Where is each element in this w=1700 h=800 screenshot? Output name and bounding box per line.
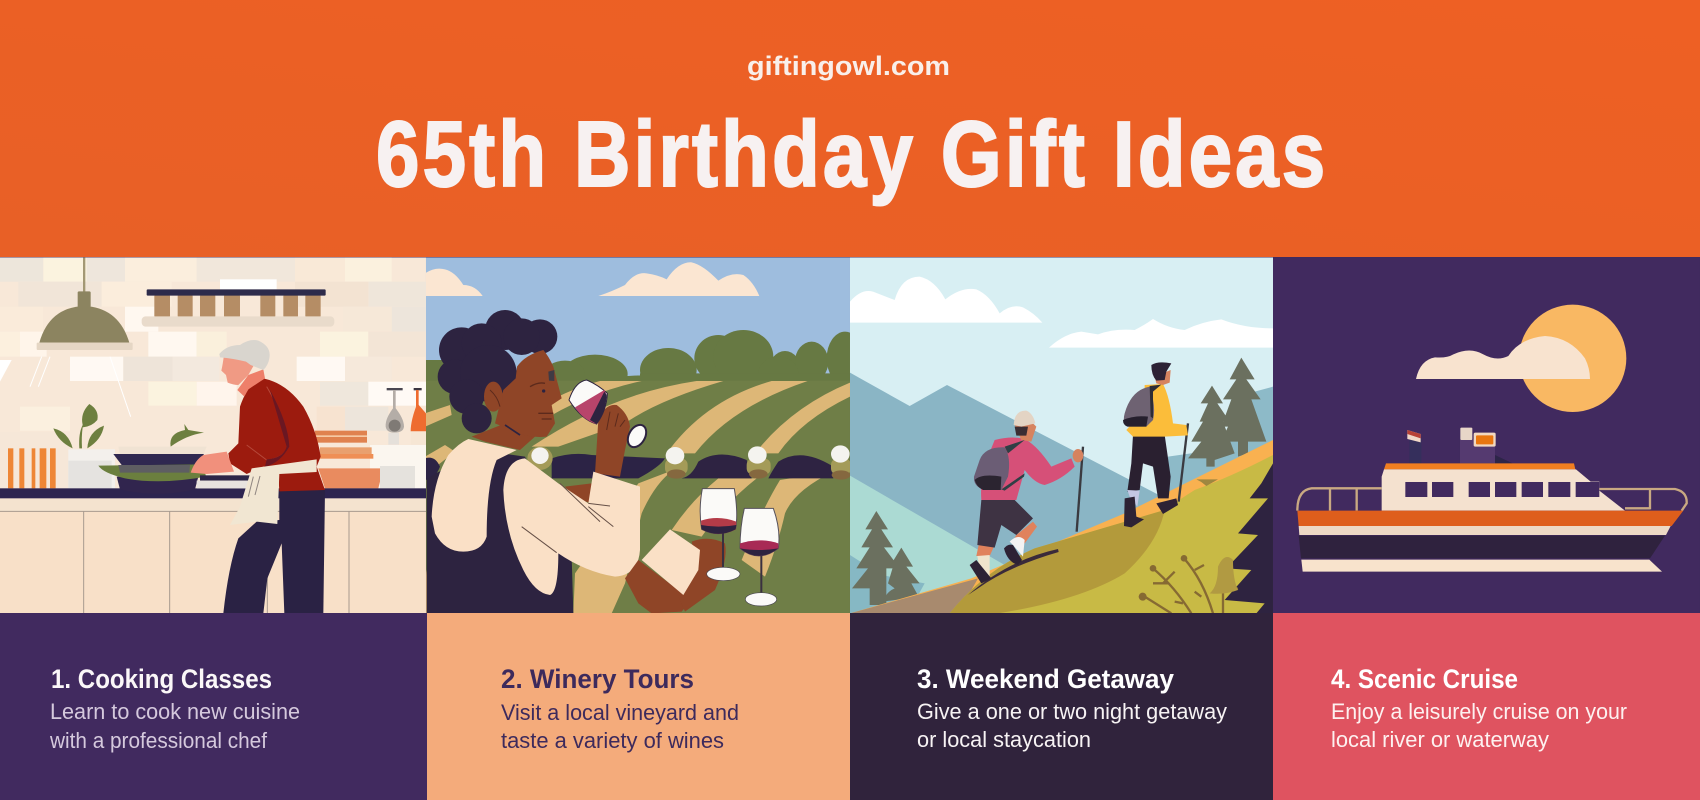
hair xyxy=(438,310,557,433)
hand xyxy=(1073,449,1083,462)
icon: cooking pans xyxy=(98,454,250,488)
clouds xyxy=(850,277,1273,348)
face xyxy=(495,350,562,437)
vineyard field xyxy=(425,381,855,621)
card: scenic cruise xyxy=(1273,613,1700,800)
yellow jacket xyxy=(1126,384,1188,437)
head xyxy=(1155,370,1171,385)
icon: hanging wine glasses xyxy=(386,388,426,445)
hill trail xyxy=(850,440,1273,613)
card heading: 2. Winery Tours xyxy=(501,664,694,694)
deck roof xyxy=(1384,463,1575,469)
hull stripes xyxy=(1297,511,1683,526)
card: winery tours xyxy=(427,613,850,800)
panel: hiking illustration xyxy=(848,257,1278,617)
dark fir right xyxy=(1225,463,1273,613)
cuff xyxy=(642,529,700,595)
card description xyxy=(917,699,1227,752)
panel: cooking illustration xyxy=(0,257,427,614)
hands xyxy=(191,452,234,474)
card description: taste a variety of wines xyxy=(501,728,724,753)
card description: Give a one or two night getaway xyxy=(917,699,1227,724)
clouds xyxy=(425,262,759,296)
face xyxy=(221,355,254,385)
card description: local river or waterway xyxy=(1331,727,1549,752)
shirt arm xyxy=(503,458,640,595)
icon: stacked books and dishes xyxy=(315,431,415,488)
title: 65th Birthday Gift Ideas xyxy=(376,103,1325,207)
icon: potted plant xyxy=(53,404,204,488)
pine trees right xyxy=(1188,358,1266,467)
card: cooking classes xyxy=(0,613,427,800)
neck xyxy=(472,423,535,450)
hillside xyxy=(950,455,1273,613)
card: weekend getaway xyxy=(850,613,1273,800)
vineyard rows xyxy=(425,381,850,613)
countertop and cabinets xyxy=(0,488,426,614)
card description: Learn to cook new cuisine xyxy=(50,699,300,724)
panel: winery illustration xyxy=(425,257,863,621)
pink jacket xyxy=(981,437,1075,500)
trekking pole xyxy=(1179,423,1188,502)
icon: orange utensils xyxy=(8,448,56,488)
backpack xyxy=(1124,387,1154,427)
sweater xyxy=(228,378,325,491)
railings xyxy=(1297,488,1687,511)
icon: spice shelf xyxy=(142,289,334,327)
funnel xyxy=(1460,439,1495,463)
icon: glass being sipped xyxy=(569,380,650,450)
vine rows with posts xyxy=(425,445,851,480)
panel: cruise illustration xyxy=(1273,257,1700,613)
site name: giftingowl.com xyxy=(747,51,950,81)
card description xyxy=(1331,699,1627,752)
trekking pole xyxy=(1077,447,1083,532)
card description: with a professional chef xyxy=(49,728,268,753)
cabin xyxy=(1382,469,1625,511)
flag mast xyxy=(1409,440,1421,463)
forearm raised xyxy=(595,405,630,477)
tiled wall xyxy=(0,257,427,490)
scarf xyxy=(237,369,265,397)
card heading: 3. Weekend Getaway xyxy=(917,664,1174,694)
icon: pendant lamp xyxy=(37,257,133,350)
pine trees left xyxy=(852,511,920,605)
figure: hiker in yellow xyxy=(1123,362,1188,527)
tree line xyxy=(426,330,850,381)
card description: or local staycation xyxy=(917,727,1091,752)
legs xyxy=(1127,435,1171,498)
icon: wine glass right xyxy=(740,508,779,606)
card heading: 1. Cooking Classes xyxy=(51,664,272,694)
back mountains xyxy=(850,373,1181,583)
apron xyxy=(230,459,317,525)
figure: hiker in pink xyxy=(970,411,1083,583)
lower arm and hand xyxy=(625,560,684,613)
hair xyxy=(219,340,270,370)
figure: woman tasting wine xyxy=(427,310,726,613)
icon: cruise ship xyxy=(1297,428,1687,572)
backpack xyxy=(974,447,1009,490)
shrubs xyxy=(1145,558,1238,613)
figure: chef cooking xyxy=(191,340,325,613)
card heading: 4. Scenic Cruise xyxy=(1331,664,1518,694)
card description xyxy=(501,700,739,753)
inner hand shadow xyxy=(565,483,592,503)
card description xyxy=(49,699,300,753)
card description: Visit a local vineyard and xyxy=(501,700,739,725)
legs xyxy=(976,545,995,556)
head xyxy=(1015,423,1036,442)
shorts xyxy=(977,500,1033,548)
icon: sun xyxy=(1519,305,1626,412)
sleeve shirt shoulder xyxy=(432,439,517,552)
trousers xyxy=(223,490,325,613)
icon: cloud xyxy=(1416,336,1590,379)
header band xyxy=(0,0,1700,257)
front mountain xyxy=(850,476,1005,613)
overalls xyxy=(427,453,573,613)
card description: Enjoy a leisurely cruise on your xyxy=(1331,699,1627,724)
icon: wine glass left xyxy=(700,489,740,581)
